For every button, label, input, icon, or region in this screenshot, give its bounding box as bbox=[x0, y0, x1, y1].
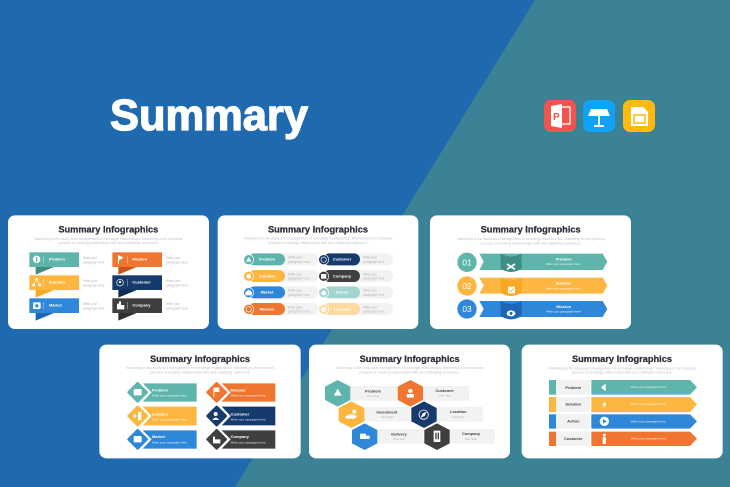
heading: Summary Infographics bbox=[268, 224, 368, 234]
description: process of creating relationships with and satisfying customers. bbox=[150, 370, 251, 374]
hexagon: location: Your Text bbox=[452, 415, 465, 419]
hexagon: customer bbox=[398, 380, 469, 407]
bar: market bbox=[129, 430, 197, 449]
row: action: Action bbox=[567, 419, 580, 424]
banner: market: paragraph here bbox=[83, 306, 105, 310]
banner: customer: paragraph here bbox=[166, 283, 188, 287]
description: Marketing is the study and management of exchange relationships. Marketing is the business bbox=[127, 366, 274, 370]
banner: solution: paragraph here bbox=[83, 283, 105, 287]
pill: solution bbox=[244, 270, 318, 282]
banner: solution: Write your bbox=[83, 279, 97, 283]
description bbox=[127, 366, 274, 374]
banner: mission bbox=[112, 252, 188, 275]
description bbox=[457, 237, 605, 245]
description: process of creating relationships with and satisfying customers. bbox=[268, 241, 368, 245]
row: customer bbox=[549, 432, 697, 446]
bar: mission: Write your paragraph here. bbox=[231, 394, 266, 398]
hexagon: investment bbox=[339, 401, 410, 428]
banner: solution: Solution bbox=[49, 280, 65, 285]
bar: customer bbox=[208, 407, 275, 425]
hexagon: company: Company bbox=[462, 431, 481, 436]
description: Marketing is the study and management of exchange relationships. Marketing is the business bbox=[336, 366, 484, 370]
ribbon: problem: 01 bbox=[462, 257, 472, 267]
bar: market: Market bbox=[152, 434, 166, 439]
hexagon: delivery: Your Text bbox=[393, 437, 405, 441]
pill: market bbox=[244, 286, 318, 298]
description: Marketing is the study and management of exchange relationships. Marketing is the business bbox=[244, 237, 393, 241]
banner: mission: Write your bbox=[166, 256, 180, 260]
pill: company: paragraph here bbox=[363, 277, 385, 281]
banner: company: paragraph here bbox=[166, 306, 188, 310]
pill: customer: paragraph here bbox=[363, 260, 385, 264]
pill: location: Write your bbox=[363, 305, 377, 309]
hexagon: location: Location bbox=[450, 409, 467, 414]
banner: company: Company bbox=[132, 302, 151, 307]
bar: solution: Write your paragraph here. bbox=[152, 417, 188, 421]
pill: company: Write your bbox=[363, 272, 377, 276]
ribbon: mission: Write your paragraph here. bbox=[546, 310, 582, 314]
row: customer: Write your paragraph here. bbox=[631, 436, 667, 440]
banner: market: Market bbox=[49, 302, 63, 307]
heading: Summary Infographics bbox=[58, 225, 158, 235]
pill: stores: Write your bbox=[363, 289, 377, 293]
pill: mission: Mission bbox=[260, 306, 275, 311]
banner: customer: Write your bbox=[166, 279, 180, 283]
row: action: Write your paragraph here. bbox=[631, 419, 667, 423]
pill: mission bbox=[244, 303, 318, 315]
banner: problem bbox=[29, 252, 105, 275]
description: process of creating relationships with and satisfying customers. bbox=[481, 241, 581, 245]
bar: company bbox=[208, 430, 275, 449]
description: Marketing is the study and management of exchange relationships. Marketing is the business bbox=[35, 237, 183, 241]
icon: Google Slides bbox=[623, 100, 655, 132]
banner: company bbox=[112, 298, 188, 321]
banner: solution bbox=[29, 275, 105, 298]
banner: problem: Problem bbox=[49, 257, 65, 262]
hexagon: customer: Your Text bbox=[439, 394, 451, 398]
description bbox=[35, 237, 183, 245]
pill: problem: Problem bbox=[259, 257, 275, 262]
hexagon: problem: Problem bbox=[365, 388, 381, 393]
pill: location: paragraph here bbox=[363, 310, 385, 314]
bar: solution: Solution bbox=[152, 411, 168, 416]
row: problem bbox=[549, 380, 697, 395]
ribbon: solution: 02 bbox=[462, 281, 472, 291]
banner: problem: paragraph here bbox=[83, 260, 105, 264]
bar: customer: Write your paragraph here. bbox=[231, 417, 266, 421]
banner: company: Write your bbox=[166, 302, 180, 306]
panel: hexagons bbox=[309, 345, 510, 458]
banner: mission: Mission bbox=[132, 256, 148, 261]
bar: problem: Problem bbox=[152, 388, 168, 393]
bar: mission: Mission bbox=[231, 388, 246, 393]
ribbon: problem: Problem bbox=[556, 256, 572, 261]
icon: Keynote bbox=[583, 100, 615, 132]
panel: diamond bars bbox=[99, 345, 301, 458]
pill: solution: Solution bbox=[259, 273, 276, 278]
ribbon: problem: Write your paragraph here. bbox=[546, 262, 582, 266]
panel: arrows bbox=[522, 345, 723, 458]
pill: mission: paragraph here bbox=[288, 310, 310, 314]
description bbox=[244, 237, 393, 245]
pill: location bbox=[319, 303, 393, 315]
bar: problem: Write your paragraph here. bbox=[152, 394, 188, 398]
description bbox=[549, 366, 696, 375]
description bbox=[336, 366, 484, 374]
description: Marketing is the study and management of exchange relationships. Marketing is the business bbox=[549, 366, 696, 370]
hexagon: company bbox=[424, 423, 495, 450]
bar: company: Company bbox=[231, 434, 250, 439]
description: process of creating relationships with and satisfying customers. bbox=[59, 241, 159, 245]
pill: stores: paragraph here bbox=[363, 293, 385, 297]
pill: market: Write your bbox=[288, 289, 302, 293]
ribbon: mission bbox=[457, 299, 607, 319]
pill: market: Market bbox=[261, 290, 274, 295]
banner: customer bbox=[112, 275, 188, 298]
ribbon: mission: 03 bbox=[462, 304, 472, 314]
banner: mission: paragraph here bbox=[166, 260, 188, 264]
banner: customer: Customer bbox=[132, 279, 151, 284]
bar: customer: Customer bbox=[231, 411, 250, 416]
pill: problem: Write your bbox=[288, 256, 302, 260]
hexagon: problem bbox=[325, 380, 397, 407]
panel: summary banners bbox=[8, 215, 209, 329]
pill: problem: paragraph here bbox=[288, 260, 310, 264]
pill: company bbox=[319, 270, 393, 282]
bar: problem bbox=[129, 383, 197, 402]
panel: summary pills bbox=[218, 215, 418, 329]
pill: customer: Customer bbox=[333, 257, 352, 262]
ribbon: solution bbox=[457, 276, 607, 296]
bar: company: Write your paragraph here. bbox=[231, 440, 266, 444]
hexagon: investment: Investment bbox=[376, 409, 398, 414]
description: process of creating relationships with and satisfying customers. bbox=[572, 371, 673, 375]
hexagon: investment: Your Text bbox=[381, 415, 393, 419]
ribbon: mission: Mission bbox=[556, 304, 572, 309]
row: solution bbox=[549, 397, 697, 412]
bar: mission bbox=[208, 383, 275, 402]
banner: market: Write your bbox=[83, 302, 97, 306]
banner: market bbox=[29, 298, 105, 321]
row: problem: Problem bbox=[565, 385, 582, 390]
ribbon: problem bbox=[457, 253, 607, 272]
row: solution: Solution bbox=[565, 402, 582, 407]
pill: solution: Write your bbox=[288, 272, 302, 276]
heading: Summary Infographics bbox=[481, 225, 581, 235]
app icons bbox=[544, 100, 655, 132]
pill: stores: Stores bbox=[336, 290, 349, 295]
hexagon: customer: Customer bbox=[435, 388, 454, 393]
heading: Summary Infographics bbox=[360, 354, 460, 364]
hexagon: company: Your Text bbox=[465, 437, 477, 441]
hexagon: delivery bbox=[352, 423, 423, 450]
pill: customer bbox=[319, 253, 393, 265]
row: customer: Customer bbox=[564, 436, 583, 441]
pill: stores bbox=[319, 286, 393, 298]
row: action bbox=[549, 414, 697, 429]
row: problem: Write your paragraph here. bbox=[631, 385, 667, 389]
pill: solution: paragraph here bbox=[288, 277, 310, 281]
hexagon: location bbox=[411, 401, 483, 428]
bar: solution bbox=[129, 407, 197, 425]
pill: problem bbox=[244, 253, 318, 265]
heading: Summary Infographics bbox=[572, 354, 672, 364]
main title: Summary bbox=[110, 91, 309, 140]
icon: PowerPoint: P bbox=[553, 112, 560, 123]
ribbon: solution: Write your paragraph here. bbox=[546, 286, 582, 290]
hexagon: problem: Your Text bbox=[367, 394, 379, 398]
description: Marketing is the study and management of exchange relationships. Marketing is the business bbox=[457, 237, 605, 241]
description: process of creating relationships with and satisfying customers. bbox=[359, 370, 460, 374]
banner: problem: Write your bbox=[83, 256, 97, 260]
pill: mission: Write your bbox=[288, 305, 302, 309]
row: solution: Write your paragraph here. bbox=[631, 402, 667, 406]
panel: numbered ribbons bbox=[430, 215, 631, 329]
heading: Summary Infographics bbox=[150, 354, 250, 364]
pill: company: Company bbox=[333, 273, 352, 278]
hexagon: delivery: Delivery bbox=[391, 431, 408, 436]
pill: location: Location bbox=[334, 306, 351, 311]
pill: market: paragraph here bbox=[288, 293, 310, 297]
bar: market: Write your paragraph here. bbox=[152, 440, 188, 444]
pill: customer: Write your bbox=[363, 256, 377, 260]
ribbon: solution: Solution bbox=[556, 281, 572, 286]
